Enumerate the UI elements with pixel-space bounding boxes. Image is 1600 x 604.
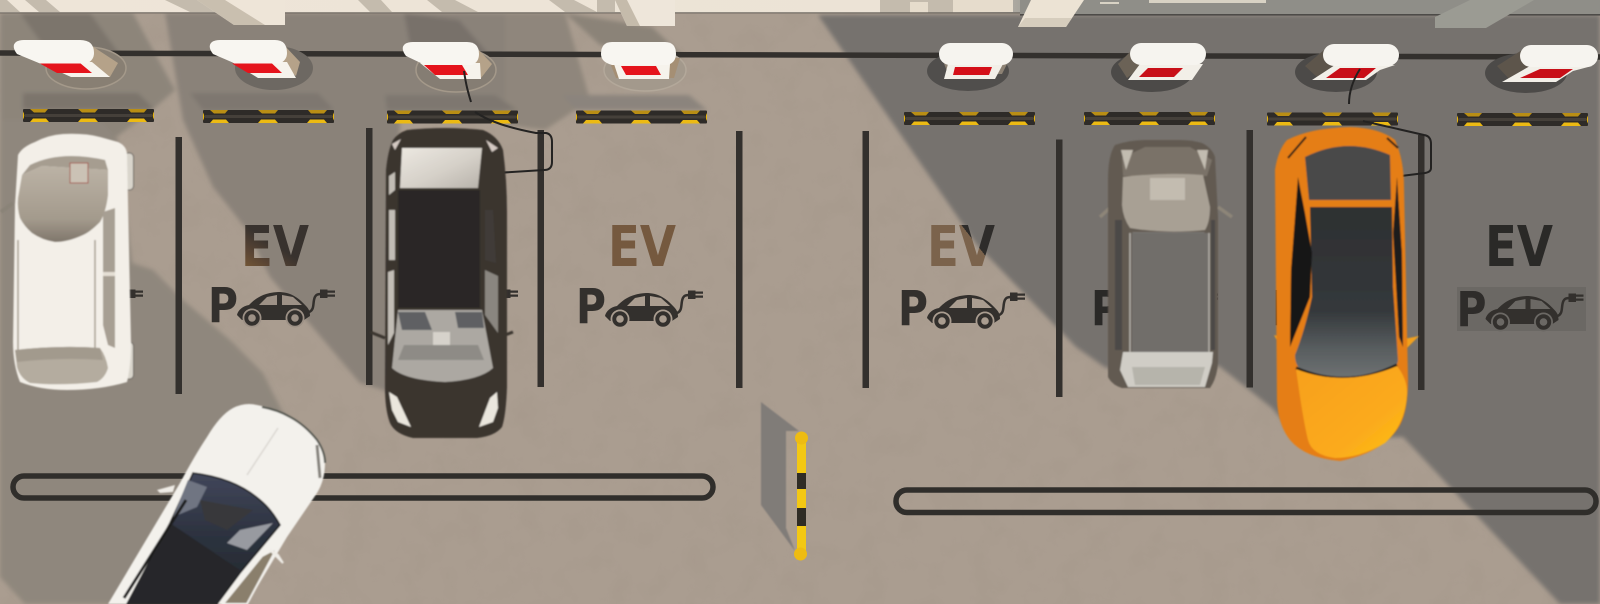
charging icon bay 2: P [576,279,606,335]
shadow: bay 1 upper right [165,13,520,393]
wheel stop 2 [203,110,334,123]
grey parked car [1100,140,1232,388]
wheel stop 8 [1457,113,1588,126]
charger 8 [1485,45,1598,93]
shadow: left column and lower left [0,120,325,604]
EV label bay 2: EV [608,215,677,280]
EV label bay 1: EV [241,215,310,280]
marking: left double line loop [13,476,713,498]
charging icon hidden by orange car [1272,281,1399,337]
charging icon hidden by grey car [1091,281,1218,337]
wheel stop 7 [1267,112,1398,126]
bay lines [176,128,1424,397]
wall [0,0,1600,28]
EV label bay 3: EV [927,215,996,280]
charger 7 [1295,44,1399,92]
wheel stop 3 [387,110,518,124]
shadow: top middle [505,13,590,130]
marking: right double line loop [896,490,1596,512]
wheel stop 6 [1084,112,1215,125]
pillar 1 [197,0,285,25]
shadow: charger 3 post [404,13,491,57]
charging icon hidden by black car: P [391,278,421,334]
charging icon bay 1 [208,278,335,334]
charging icon hidden by orange car: P [1272,281,1302,337]
charging icon bay 4: P [1456,282,1486,338]
charging icon hidden by white car: P [16,278,46,334]
black parked car [370,128,513,438]
pillar 2 [615,0,675,26]
charger 3 [403,42,496,92]
charging cable orange car [1349,69,1431,176]
orange parked car [1274,127,1419,461]
charging icon bay 3: P [898,281,928,337]
charger 2 [210,40,313,90]
top boundary line [0,53,1600,57]
shadow: right building [818,15,1600,604]
charging icon hidden by grey car: P [1091,281,1121,337]
EV label bay 4: EV [1485,215,1554,280]
charging icon bay 4 [1456,282,1584,338]
pillar 4 [1435,0,1534,28]
wheel stop 1 [23,109,154,122]
charging cable black car [464,71,552,173]
yellow and black bollard [761,402,808,560]
white moving car [108,404,325,604]
shadow: wheel stop 3 [385,95,517,110]
charging icon hidden by black car [391,278,518,334]
charging icon bay 3 [898,281,1025,337]
pillar 3 [1018,0,1084,27]
shadow: wheel stop 2 [190,93,334,110]
charging icon bay 4 background [1457,287,1586,331]
charger 1 [14,40,126,89]
charger 6 [1111,43,1206,92]
shadow: wheel stop 1 [23,93,154,109]
shadow: charger 4 post [565,13,684,57]
charger 4 [601,42,686,91]
white parked car [1,134,134,390]
charger 5 [927,43,1013,91]
wheel stop 4 [576,110,707,124]
shadow: wheel stop 4 [562,95,707,110]
shadow: top left under chargers [0,13,175,138]
shadow: charger 1 post [20,13,120,55]
charging icon bay 2 [576,279,703,335]
wheel stop 5 [904,112,1035,125]
charging icon hidden by white car [16,278,143,334]
charging icon bay 1: P [208,278,238,334]
